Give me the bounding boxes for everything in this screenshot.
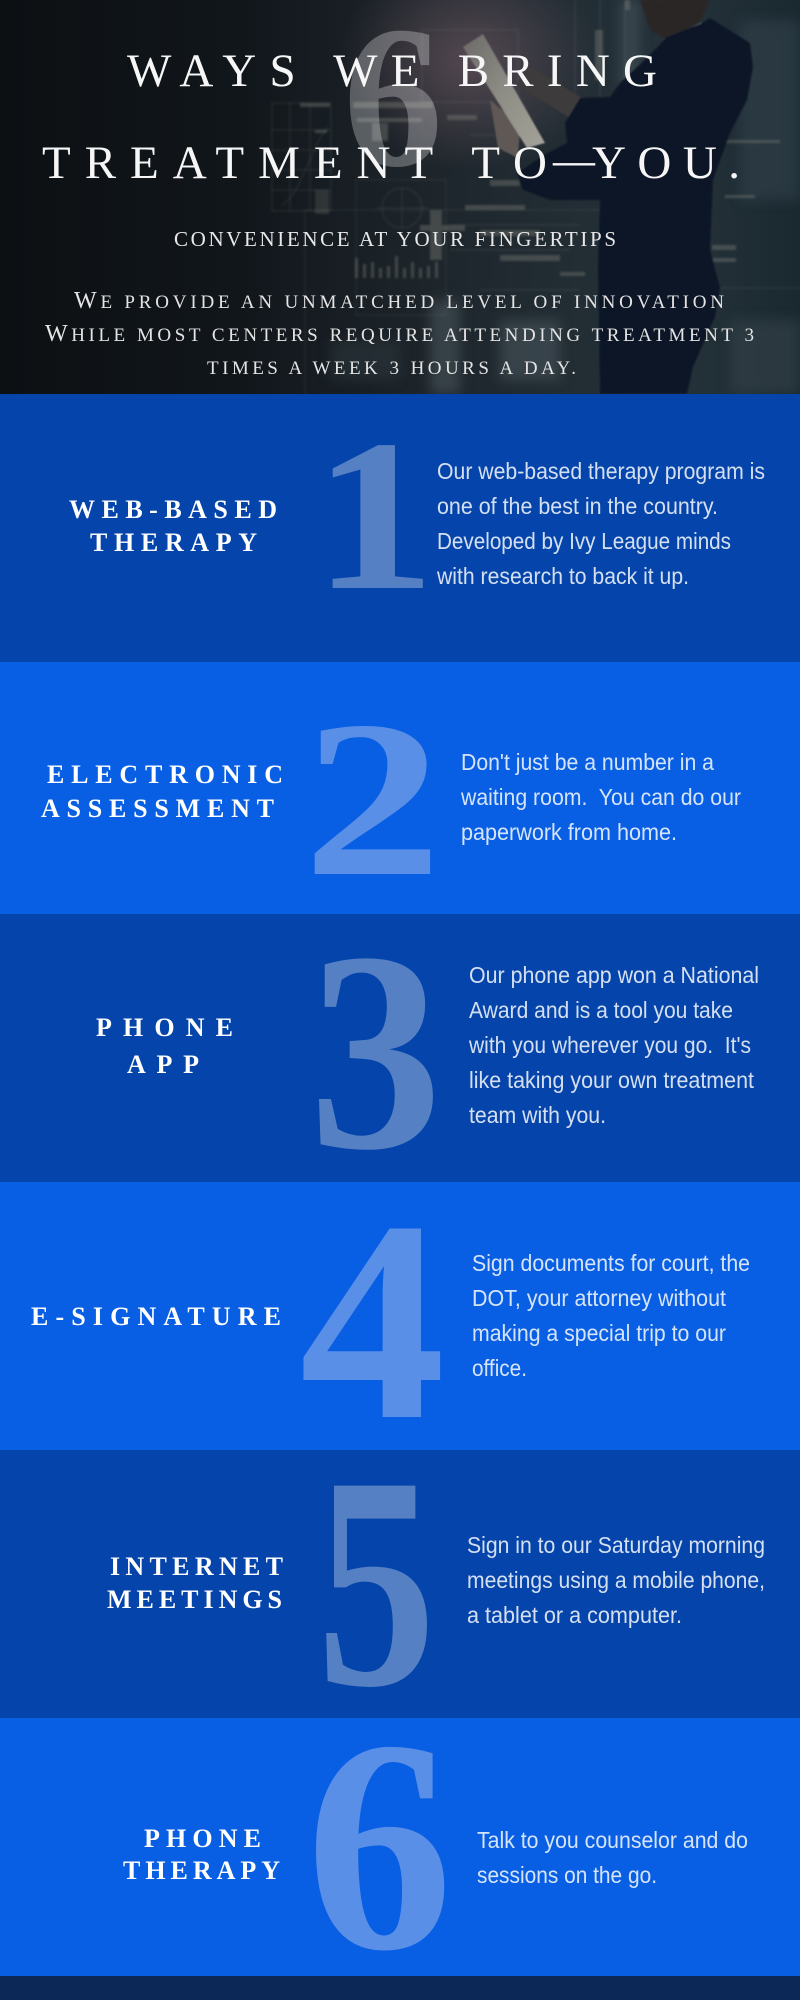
intro text: WHILE MOST CENTERS REQUIRE ATTENDING TREATMENT 3 [45, 321, 754, 347]
description: phone app [468, 962, 759, 1128]
header panel [0, 0, 800, 445]
footer band [0, 1976, 800, 2000]
description: phone app: with you wherever you go. It's [468, 1032, 751, 1058]
description: web-based therapy [436, 458, 765, 589]
heading: electronic assessment [41, 760, 283, 823]
heading: web-based therapy: THERAPY [90, 528, 257, 557]
heading: phone therapy: THERAPY [123, 1856, 280, 1885]
description: internet meetings: Sign in to our Saturday morning [467, 1532, 765, 1558]
subtitle: CONVENIENCE AT YOUR FINGERTIPS [174, 227, 616, 251]
description: electronic assessment [460, 749, 741, 845]
heading: internet meetings [107, 1552, 283, 1614]
description: web-based therapy: Our web-based therapy program is [437, 458, 765, 484]
description: e-signature: Sign documents for court, the [472, 1250, 750, 1276]
intro text: WE PROVIDE AN UNMATCHED LEVEL OF INNOVATION [74, 288, 724, 314]
description: e-signature: making a special trip to our [472, 1320, 726, 1346]
number 5: 5 [317, 1414, 436, 1750]
description: electronic assessment: Don't just be a number in a [461, 749, 714, 775]
description: electronic assessment: waiting room. You can do our [460, 784, 741, 810]
panel: phone app [0, 893, 800, 1209]
title: YOU. [592, 137, 740, 189]
panel: electronic assessment [0, 662, 800, 923]
heading: phone app: APP [127, 1050, 199, 1079]
number 1: 1 [313, 396, 435, 636]
heading: internet meetings: MEETINGS [107, 1585, 282, 1614]
heading: phone therapy: PHONE [144, 1824, 261, 1853]
heading: phone app: PHONE [96, 1013, 233, 1042]
panel: phone therapy [0, 1677, 800, 2000]
heading: web-based therapy: WEB-BASED [69, 495, 277, 524]
heading: electronic assessment: ELECTRONIC [47, 760, 283, 789]
title [42, 45, 740, 189]
header background photo [0, 0, 800, 445]
description: phone therapy: Talk to you counselor and do [477, 1827, 748, 1853]
title: TREATMENT TO [42, 137, 547, 189]
heading: electronic assessment: ASSESSMENT [41, 794, 274, 823]
description: web-based therapy: Developed by Ivy League minds [437, 528, 731, 554]
description: phone therapy [477, 1827, 748, 1888]
description: web-based therapy: with research to back it up. [436, 563, 689, 589]
description: internet meetings [467, 1532, 765, 1628]
intro text [45, 288, 754, 379]
panel: e-signature [0, 1162, 800, 1479]
panel: web-based therapy [0, 394, 800, 662]
description: phone app: Our phone app won a National [469, 962, 759, 988]
description: phone app: Award and is a tool you take [469, 997, 733, 1023]
description: e-signature [472, 1250, 750, 1381]
number 3: 3 [309, 893, 442, 1209]
description: phone app: like taking your own treatment [469, 1067, 755, 1093]
number 4: 4 [300, 1162, 446, 1479]
heading: internet meetings: INTERNET [110, 1552, 283, 1581]
heading: e-signature: E-SIGNATURE [31, 1302, 281, 1331]
description: internet meetings: meetings using a mobile phone, [467, 1567, 765, 1593]
person silhouette [463, 0, 753, 394]
description: web-based therapy: one of the best in the country. [437, 493, 718, 519]
title: WAYS WE BRING [127, 45, 657, 97]
description: internet meetings: a tablet or a computer. [467, 1602, 682, 1628]
intro text: TIMES A WEEK 3 HOURS A DAY. [207, 358, 576, 379]
heading: phone app [96, 1013, 233, 1079]
description: e-signature: DOT, your attorney without [472, 1285, 727, 1311]
panel: internet meetings [0, 1414, 800, 1750]
description: phone app: team with you. [469, 1102, 606, 1128]
heading: phone therapy [123, 1824, 280, 1885]
description: electronic assessment: paperwork from home. [461, 819, 677, 845]
number 2: 2 [303, 675, 442, 923]
title: — [552, 134, 596, 186]
heading: web-based therapy [69, 495, 277, 557]
description: e-signature: office. [472, 1355, 527, 1381]
description: phone therapy: sessions on the go. [477, 1862, 657, 1888]
